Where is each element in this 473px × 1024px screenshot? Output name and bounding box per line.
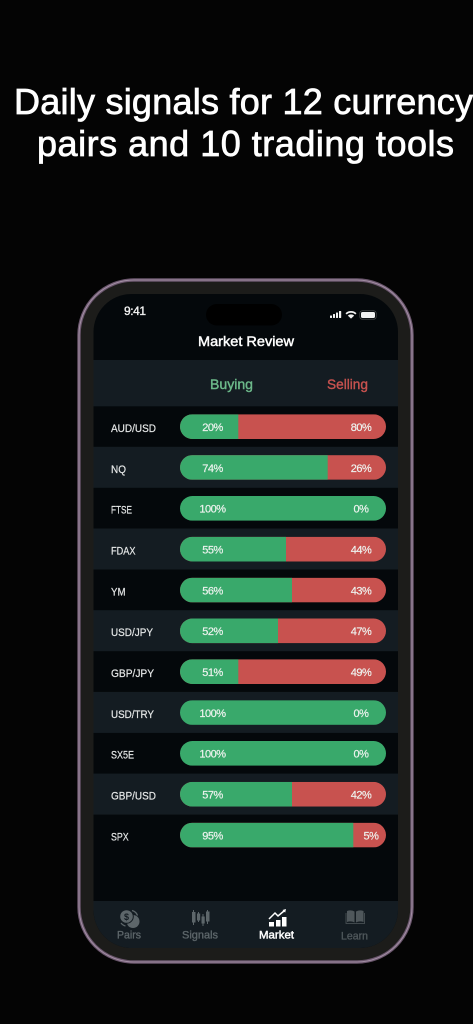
phone frame (79, 280, 412, 962)
row: USD/JPY: 52% (202, 626, 223, 638)
row: FDAX (111, 537, 386, 562)
tab: Pairs (117, 910, 141, 941)
status bar time: 9:41 (124, 304, 146, 318)
row: SPX (111, 823, 386, 847)
icon: rising bar chart (269, 909, 286, 926)
alternating row band: GBP/USD (94, 774, 398, 815)
alternating row band: NQ (94, 447, 398, 488)
row: SPX: SPX (111, 831, 129, 843)
tab: Learn: Learn (341, 930, 368, 942)
row: SX5E (111, 741, 386, 766)
row: NQ (111, 455, 386, 480)
title: Daily signals for 12 currency (14, 81, 473, 122)
row: FDAX: FDAX (111, 545, 136, 557)
row: NQ: 26% (351, 463, 372, 475)
row: SX5E: SX5E (111, 750, 134, 762)
tab: Pairs: Pairs (117, 929, 141, 941)
row: USD/JPY: USD/JPY (111, 627, 153, 639)
row: FTSE: 0% (354, 504, 369, 516)
icon: open book (346, 910, 364, 924)
row: USD/TRY (111, 700, 386, 725)
status bar icons (330, 311, 376, 319)
alternating row band: FDAX (94, 528, 398, 570)
row: USD/TRY: 100% (199, 708, 226, 720)
row: GBP/USD: 42% (351, 790, 372, 802)
title: pairs and 10 trading tools (37, 123, 454, 164)
row: FTSE (111, 496, 386, 521)
row: USD/TRY: USD/TRY (111, 709, 154, 721)
row: GBP/JPY: GBP/JPY (111, 668, 154, 680)
row: GBP/USD: GBP/USD (111, 791, 156, 803)
phone mockup (79, 280, 412, 962)
row: GBP/JPY: 49% (351, 667, 372, 679)
row: NQ: NQ (111, 464, 126, 476)
row: FDAX: 55% (202, 544, 223, 556)
alternating row band: USD/JPY (94, 610, 398, 651)
column heading: selling: Selling (327, 376, 368, 392)
dynamic island (206, 304, 282, 326)
row: YM: YM (111, 586, 126, 598)
screen (94, 294, 398, 948)
row: GBP/JPY: 51% (202, 667, 223, 679)
title (14, 81, 473, 164)
tab bar background (94, 901, 398, 948)
row: GBP/USD (111, 782, 386, 807)
icon: coins: $ (124, 912, 129, 922)
row: USD/JPY (111, 618, 386, 643)
row: AUD/USD: AUD/USD (111, 423, 156, 435)
phone frame highlight (79, 280, 412, 962)
row: SX5E: 0% (354, 749, 369, 761)
row: SPX: 5% (364, 830, 379, 842)
row: YM (111, 578, 386, 602)
row: AUD/USD: 20% (202, 422, 223, 434)
tab: Market (259, 909, 294, 941)
screen heading: Market Review (198, 333, 295, 349)
row: YM: 43% (351, 585, 372, 597)
row: FTSE: FTSE (111, 505, 132, 517)
row: SPX: 95% (202, 830, 223, 842)
row: AUD/USD: 80% (351, 422, 372, 434)
screen background (94, 294, 398, 948)
row: AUD/USD (111, 414, 386, 439)
row: GBP/JPY (111, 659, 386, 684)
alternating row band: USD/TRY (94, 692, 398, 733)
row: FDAX: 44% (351, 544, 372, 556)
icon: candlesticks (192, 910, 209, 926)
row: SX5E: 100% (199, 749, 226, 761)
tab: Signals (182, 910, 218, 941)
table header band (94, 360, 398, 406)
column heading: buying: Buying (210, 376, 253, 392)
row: USD/TRY: 0% (354, 708, 369, 720)
row: NQ: 74% (202, 463, 223, 475)
tab: Market: Market (259, 929, 294, 941)
row: FTSE: 100% (199, 504, 226, 516)
row: GBP/USD: 57% (202, 790, 223, 802)
row: YM: 56% (202, 585, 223, 597)
tab: Learn (341, 910, 368, 942)
row: USD/JPY: 47% (351, 626, 372, 638)
tab: Signals: Signals (182, 929, 218, 941)
